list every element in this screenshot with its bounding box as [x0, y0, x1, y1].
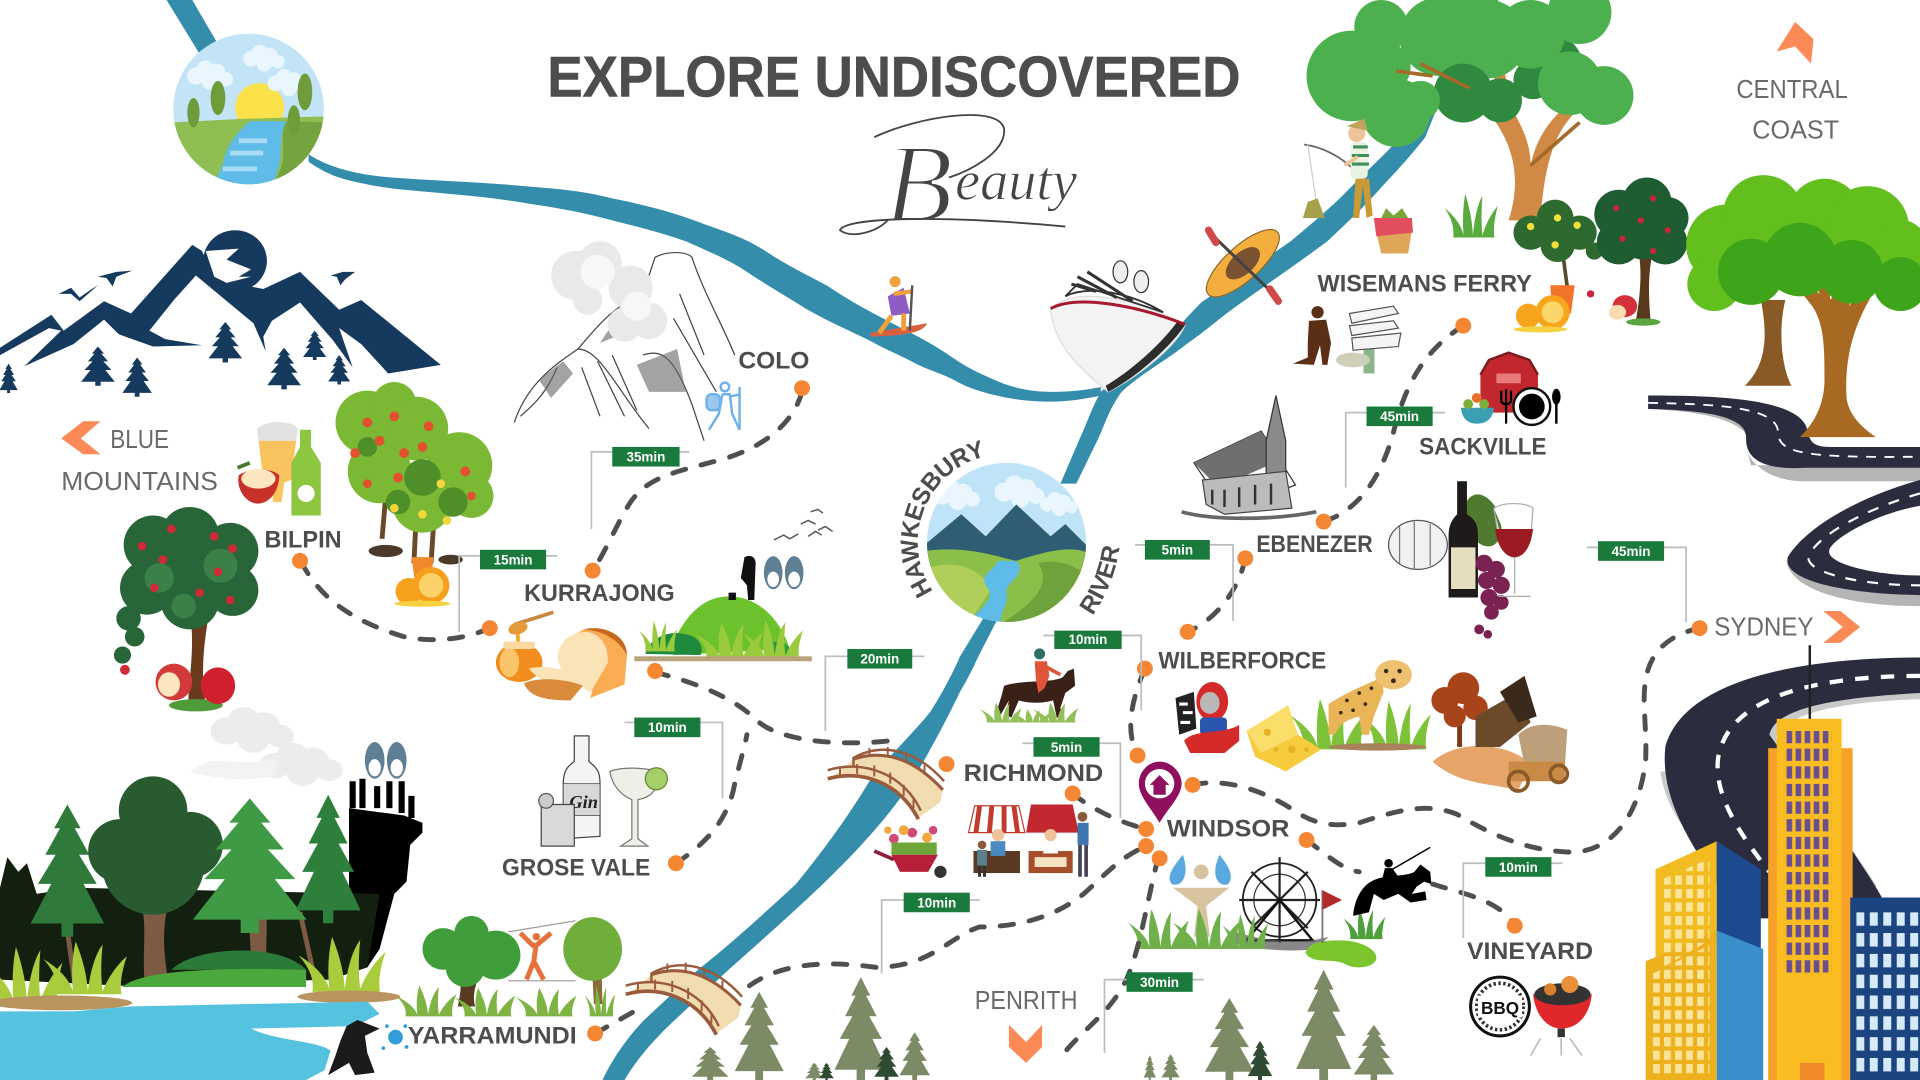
sign: 15min: [459, 550, 557, 632]
label: Vineyard: VINEYARD: [1467, 938, 1593, 965]
sign: 5min Ebenezer: 5min: [1162, 543, 1193, 558]
sign: 45min Sydney: 45min: [1612, 544, 1650, 559]
illustration: apple tree right: [1587, 178, 1689, 326]
illustration: autumn homestead and wagon: [1431, 672, 1567, 791]
icon: Windsor home pin: [1139, 762, 1182, 823]
picnic basket: [1374, 208, 1413, 253]
illustration: grass tuft: [1445, 193, 1498, 238]
illustration: wetland grass: [1128, 909, 1268, 949]
illustration: fruit orchard trees: [336, 382, 493, 607]
label: Kurrajong: KURRAJONG: [524, 580, 675, 607]
arrow: Central Coast: [1777, 22, 1813, 64]
river: Hawkesbury main channel: [602, 113, 1435, 1080]
arrow: Penrith: [1009, 1025, 1042, 1063]
road: Sydney: [1663, 658, 1920, 918]
yellow block: [1646, 841, 1763, 1080]
illustration: large green trees right: [1686, 175, 1920, 437]
road: central coast lower: [1787, 480, 1920, 606]
hill: [122, 950, 306, 987]
sign: 20min: [825, 649, 924, 731]
sign: 15min: 15min: [494, 552, 533, 567]
route: Richmond to Windsor: [1073, 793, 1146, 829]
sign: 5min Richmond: 5min: [1051, 740, 1082, 755]
label: Blue Mountains: MOUNTAINS: [61, 466, 218, 496]
label: River: RIVER: [1079, 546, 1120, 615]
river: Hawkesbury upper branch: [167, 0, 1101, 402]
mountains: Blue Mountains silhouette: [0, 230, 441, 397]
sign: 45min Sackville: [1346, 407, 1445, 487]
route: Kurrajong to Richmond bridge: [655, 672, 900, 743]
label: Ebenezer: EBENEZER: [1256, 531, 1373, 558]
label: Blue Mountains: BLUE: [110, 424, 169, 454]
tower: [1768, 645, 1853, 1080]
sign: 45min Sydney: [1587, 541, 1686, 622]
illustration: apple tree: [114, 507, 258, 711]
arrow: Sydney: [1823, 611, 1860, 643]
illustration: horse rider: [980, 648, 1078, 722]
subtitle: Beauty: [840, 115, 1078, 247]
illustration: church sketch: [1182, 396, 1316, 518]
label: Central Coast: COAST: [1752, 114, 1839, 144]
illustration: fountain: [1170, 855, 1231, 937]
scene: Hawkesbury valley circle: [924, 460, 1090, 626]
sign: 5min Richmond: [1022, 737, 1120, 818]
icon: BBQ badge: [1471, 977, 1529, 1036]
sign: 30min: 30min: [1140, 975, 1179, 990]
binoculars: [365, 742, 407, 779]
route: Wilberforce: [1131, 669, 1145, 756]
illustration: go-kart: [1176, 682, 1239, 753]
label: Bilpin: BILPIN: [264, 526, 342, 553]
sign: 10min Yarramundi: [882, 893, 980, 973]
illustration: gin and cocktails: Gin: [569, 792, 598, 812]
fisherman: [1303, 119, 1373, 218]
route: Sackville: [1324, 326, 1463, 522]
icon: paintball player: [328, 1020, 408, 1075]
cliff: [349, 779, 422, 967]
dark forest: [0, 857, 380, 986]
illustration: cider glass, bottle and apple: [238, 422, 321, 516]
illustration: gin and cocktails: [539, 736, 667, 846]
sign: 35min: [591, 447, 689, 529]
subtitle: Beauty: eauty: [955, 151, 1078, 213]
icon: grill: [1531, 976, 1592, 1056]
label: Colo: COLO: [738, 348, 809, 375]
label: Wilberforce: WILBERFORCE: [1158, 648, 1326, 675]
sign: 10min Wilberforce: 10min: [1069, 632, 1107, 647]
icon: BBQ badge: BBQ: [1481, 998, 1519, 1018]
route: Bilpin: [301, 562, 490, 640]
label: Sackville: SACKVILLE: [1419, 433, 1547, 460]
illustration: water wheel: [1231, 857, 1329, 950]
label: Grose Vale: GROSE VALE: [502, 855, 650, 882]
sign: 10min Wilberforce: [1043, 631, 1141, 710]
subtitle: Beauty: B: [884, 123, 953, 247]
sign: 20min: 20min: [860, 652, 899, 667]
sign: 10min Grose Vale: [624, 718, 722, 798]
icon: silhouette with binoculars: [729, 556, 803, 600]
clouds: [211, 707, 343, 786]
road: central coast upper: [1648, 396, 1920, 481]
tree: large gum tree: [1307, 0, 1633, 220]
illustration: polo horse: [1353, 847, 1431, 916]
route: Vineyard: [1307, 840, 1515, 926]
route: Grose Vale: [676, 735, 747, 863]
label: Penrith: PENRITH: [975, 985, 1078, 1015]
navy block: [1850, 898, 1920, 1080]
label: Wisemans Ferry: WISEMANS FERRY: [1318, 270, 1532, 297]
location dots: [292, 318, 1708, 1041]
illustration: wine, barrel and grapes: [1389, 481, 1533, 639]
sign: 10min Vineyard: [1463, 857, 1562, 938]
illustration: hiker with signpost: [1293, 306, 1401, 373]
sign: 5min Ebenezer: [1135, 540, 1233, 621]
illustration: cheese and cheetah: [1247, 660, 1431, 771]
sign: 10min Grose Vale: 10min: [648, 720, 687, 735]
title: EXPLORE UNDISCOVERED: [547, 46, 1240, 110]
icon: river sunrise circle: [171, 32, 328, 186]
illustration: Colo mountain sketch: [514, 241, 735, 441]
label: Richmond: RICHMOND: [964, 760, 1103, 787]
route: Penrith: [1064, 857, 1158, 1053]
pine trees: bottom: [692, 970, 1394, 1080]
label: Windsor: WINDSOR: [1167, 815, 1290, 842]
icon: blue hiker: [707, 383, 740, 430]
illustration: market stalls: [969, 804, 1089, 877]
icon: birds: [774, 509, 833, 540]
route: Ebenezer: [1188, 558, 1245, 632]
label: Central Coast: CENTRAL: [1736, 74, 1848, 104]
label: Central Coast: [1736, 74, 1848, 144]
illustration: barn with salad and cutlery: [1461, 353, 1561, 425]
water: [0, 1002, 380, 1080]
sign: 10min Yarramundi: 10min: [917, 895, 956, 910]
icon: bridge lower: [626, 962, 742, 1035]
sign: 30min: [1104, 972, 1204, 1053]
label: Sydney: SYDNEY: [1714, 612, 1813, 642]
icon: paddle boarder: [869, 276, 927, 337]
route: Colo to Kurrajong: [593, 392, 802, 571]
illustration: Yarramundi high ropes: [396, 916, 622, 1016]
label: Blue Mountains: [61, 424, 218, 496]
icon: cruise ship: [1051, 261, 1185, 392]
sign: 35min: 35min: [626, 450, 665, 465]
illustration: orange lemon tree: [1513, 200, 1603, 332]
forest trees: [31, 776, 361, 992]
reeds: [0, 937, 386, 1004]
arrow: Blue Mountains: [61, 421, 100, 454]
illustration: lookout hill: [634, 596, 812, 661]
illustration: honey jar and bread: [496, 612, 627, 700]
buildings: city skyline: [1646, 645, 1920, 1080]
illustration: golf green: [1305, 890, 1385, 967]
route: Yarramundi to Windsor: [749, 846, 1146, 986]
illustration: flower barrow: [874, 825, 947, 878]
sign: 10min Vineyard: 10min: [1499, 860, 1538, 875]
sand: [0, 991, 400, 1010]
label: Hawkesbury: HAWKESBURY: [900, 440, 980, 598]
route: Windsor to Sydney: [1193, 628, 1700, 852]
route: Yarramundi bridge: [595, 1007, 643, 1033]
label: Yarramundi: YARRAMUNDI: [408, 1022, 577, 1049]
icon: kayak: [1197, 219, 1289, 307]
illustration: forest lake scene: [0, 707, 422, 1080]
icon: bridge upper: [828, 747, 944, 819]
sign: 45min Sackville: 45min: [1380, 409, 1419, 424]
